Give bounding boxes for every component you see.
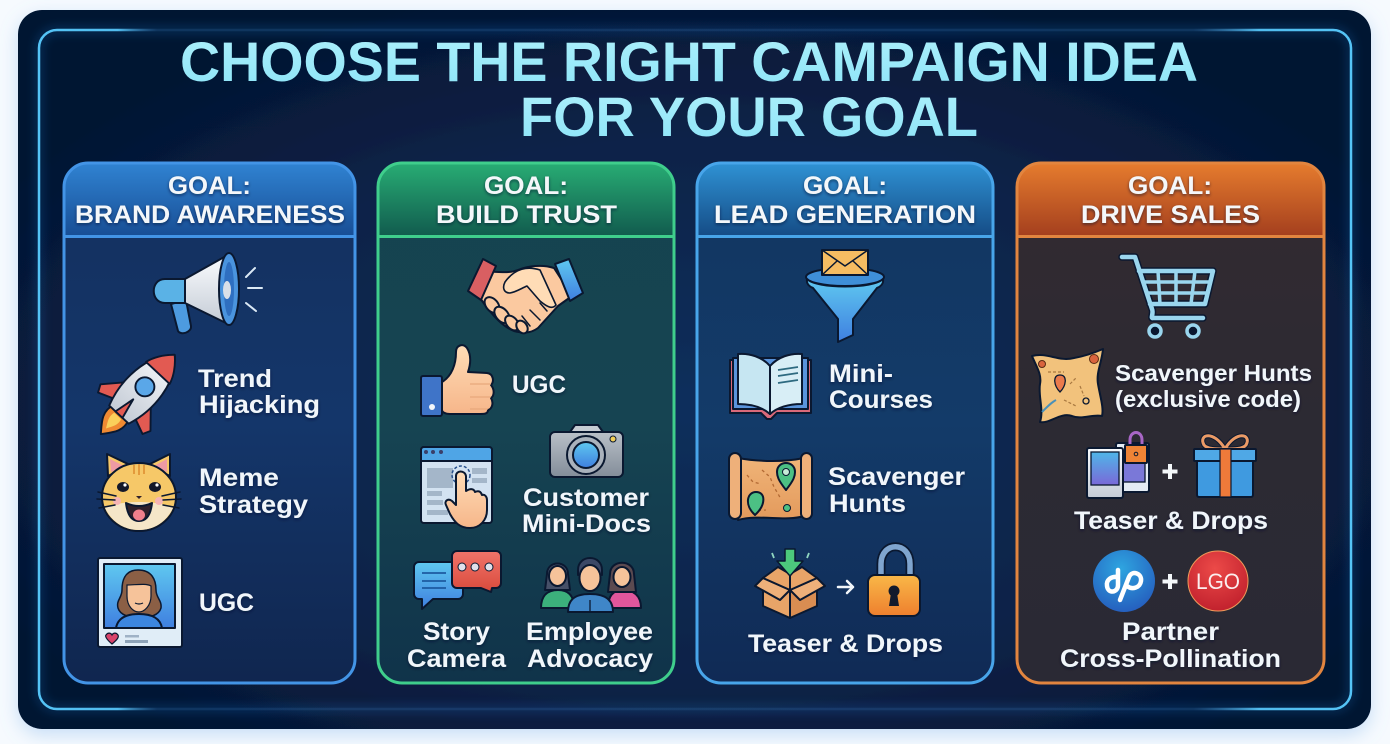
header: build trust: GOAL: (484, 172, 568, 200)
icon: teaser photos with bag (1087, 432, 1149, 498)
item: ugc (421, 345, 566, 416)
label: Story Camera: Story (423, 618, 490, 646)
icon: cat (97, 454, 181, 531)
item: teaser and drops (1074, 432, 1268, 535)
label: Scavenger Hunts (828, 463, 965, 518)
label: Meme Strategy (199, 464, 308, 519)
icon: arrow (838, 581, 853, 593)
label: Teaser & Drops: Teaser & Drops (1074, 507, 1268, 535)
icon: padlock (868, 547, 920, 616)
label: Trend Hijacking: Trend (198, 365, 272, 393)
header: build trust: BUILD TRUST (436, 201, 617, 229)
icon: open book (730, 354, 811, 419)
label: Partner Cross-Pollination: Partner (1122, 618, 1219, 646)
icon: megaphone (154, 253, 262, 333)
header: brand awareness: BRAND AWARENESS (75, 201, 345, 229)
title: CHOOSE THE RIGHT CAMPAIGN IDEA (180, 30, 1198, 93)
item: partner cross-pollination (1060, 550, 1281, 673)
header: drive sales: DRIVE SALES (1081, 201, 1260, 229)
label: Customer Mini-Docs (522, 484, 651, 538)
item: meme strategy (97, 454, 308, 531)
label: Employee Advocacy: Advocacy (527, 645, 653, 673)
item: mini-courses (730, 354, 933, 419)
header: drive sales (1017, 163, 1324, 236)
title (180, 30, 1198, 148)
label: Scavenger Hunts (exclusive code) (1115, 360, 1312, 412)
label: Scavenger Hunts (exclusive code): (exclusive code) (1115, 386, 1301, 412)
icon: plus (1162, 464, 1178, 479)
label: Mini-Courses (829, 360, 933, 414)
header: lead generation (697, 163, 993, 236)
label: Customer Mini-Docs: Mini-Docs (522, 510, 651, 538)
icon: red LGO logo: LGO (1196, 569, 1240, 594)
icon: torn treasure map (1032, 349, 1103, 422)
item: employee advocacy (526, 558, 653, 673)
icon: three people (541, 558, 641, 612)
label: Partner Cross-Pollination: Cross-Pollination (1060, 645, 1281, 673)
item: ugc (98, 558, 254, 647)
label: Story Camera: Camera (407, 645, 507, 673)
header: lead generation: GOAL: (803, 172, 887, 200)
item: scavenger hunts (729, 453, 965, 520)
icon: blue partner logo (1093, 550, 1155, 612)
icon: red LGO logo (1188, 551, 1248, 611)
header: brand awareness: GOAL: (168, 172, 251, 200)
label: Meme Strategy: Strategy (199, 491, 308, 519)
icon: plus (1162, 574, 1178, 589)
label: Meme Strategy: Meme (199, 464, 279, 492)
icon: gift box (1194, 436, 1256, 497)
label: Trend Hijacking: Hijacking (199, 391, 320, 419)
item: story camera (407, 551, 507, 673)
icon: camera (550, 425, 623, 477)
label: Scavenger Hunts (exclusive code): Scavenger Hunts (1115, 360, 1312, 386)
label: UGC: UGC (199, 589, 254, 617)
icon: thumbs up (421, 345, 494, 416)
header: build trust (378, 163, 674, 236)
label: Mini-Courses: Mini- (829, 360, 893, 388)
icon: box with arrow (755, 549, 825, 618)
item: customer mini-docs (522, 425, 651, 538)
label: Mini-Courses: Courses (829, 386, 933, 414)
icon: browser with pointer (421, 447, 492, 528)
icon: funnel with envelope (806, 250, 884, 342)
panel: drive sales (1017, 163, 1324, 683)
icon: rocket (76, 332, 200, 457)
panel: lead generation (697, 163, 993, 683)
label: Story Camera (407, 618, 507, 673)
label: Employee Advocacy: Employee (526, 618, 653, 646)
item: scavenger hunts exclusive code (1032, 349, 1312, 422)
item: teaser and drops (748, 547, 943, 658)
label: Scavenger Hunts: Scavenger (828, 463, 965, 491)
label: Employee Advocacy (526, 618, 653, 673)
label: Teaser & Drops: Teaser & Drops (748, 630, 943, 658)
header: drive sales: GOAL: (1128, 172, 1212, 200)
item: trend hijacking (76, 332, 320, 457)
panel: build trust (378, 163, 674, 683)
icon: handshake (468, 259, 583, 336)
icon: photo post (98, 558, 182, 647)
panel: brand awareness (64, 163, 355, 683)
title: FOR YOUR GOAL (520, 85, 978, 148)
label: Customer Mini-Docs: Customer (523, 484, 649, 512)
label: Partner Cross-Pollination (1060, 618, 1281, 673)
header: brand awareness (64, 163, 355, 236)
label: UGC: UGC (512, 371, 566, 399)
label: Trend Hijacking (198, 365, 320, 419)
icon: chat bubbles (414, 551, 501, 609)
header: lead generation: LEAD GENERATION (714, 201, 976, 229)
icon: shopping cart (1122, 257, 1213, 337)
label: Scavenger Hunts: Hunts (829, 490, 906, 518)
icon: treasure map scroll (729, 453, 812, 520)
